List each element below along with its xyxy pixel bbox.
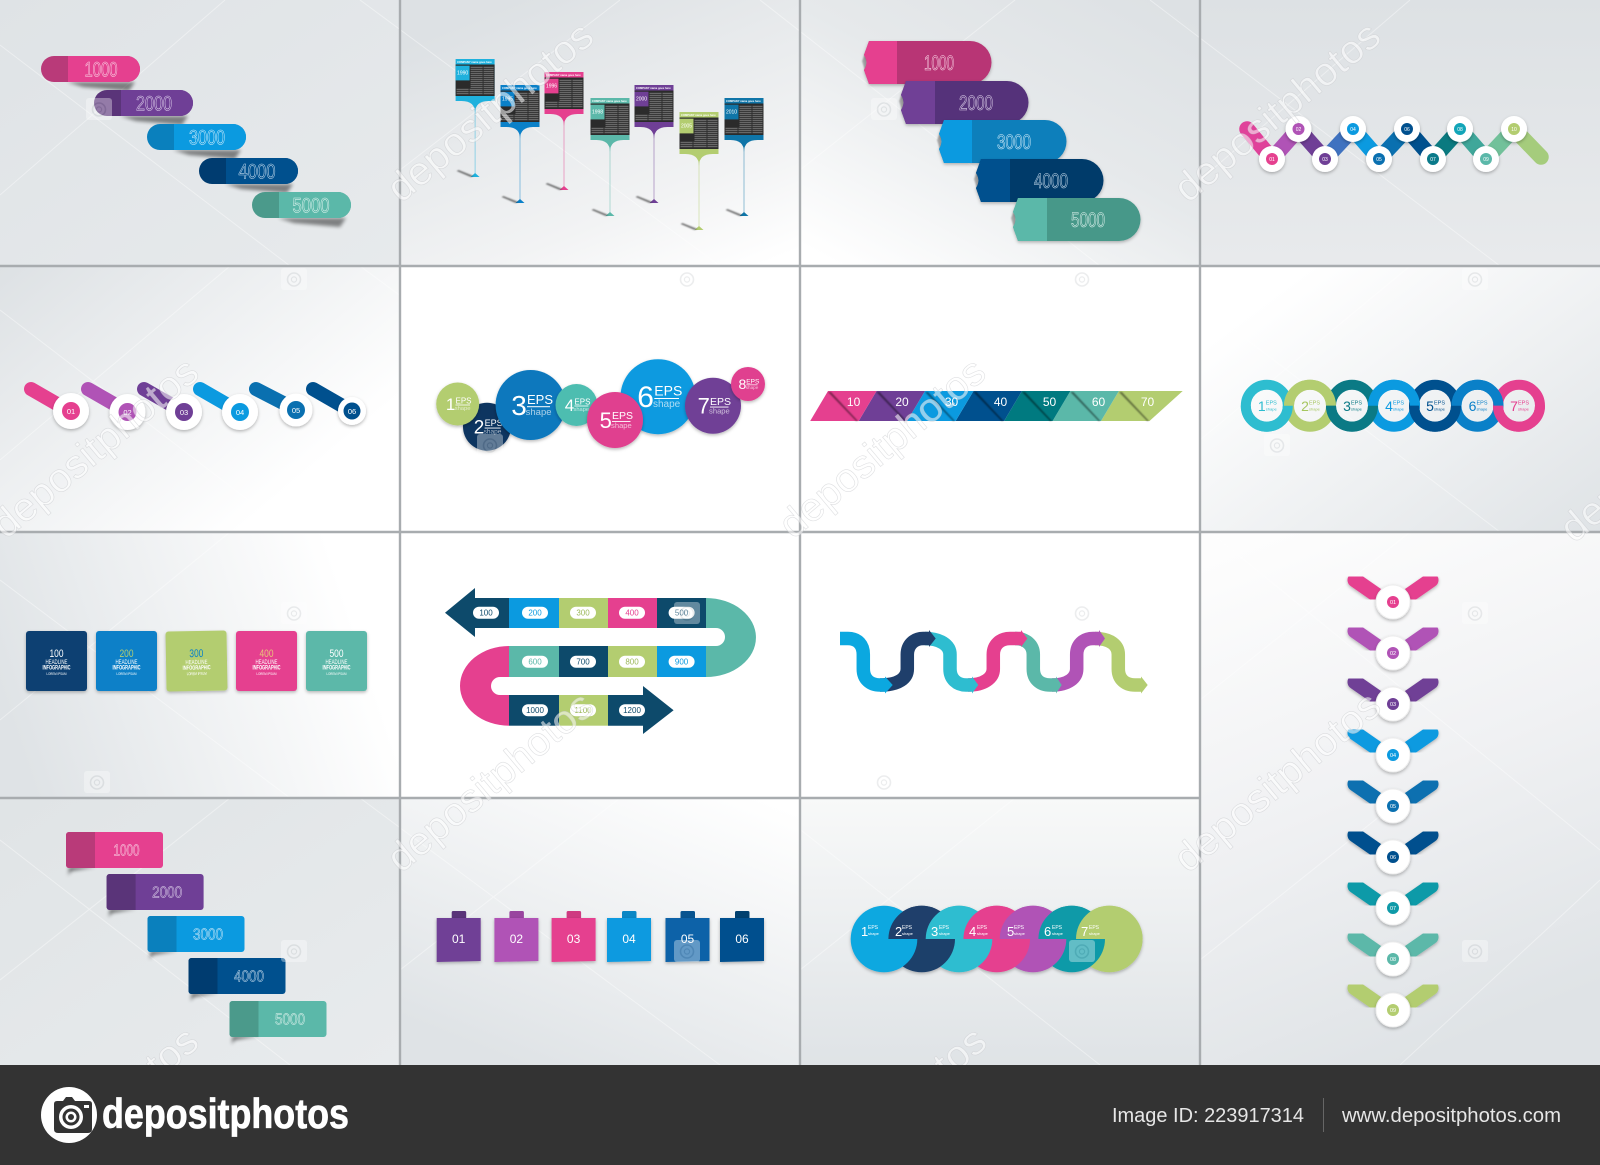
tab 4000: 4000 xyxy=(1034,170,1068,193)
circle upper halves xyxy=(888,906,1143,939)
pill 2000: 2000 xyxy=(136,92,172,116)
ring labels: shape xyxy=(1393,406,1405,412)
winged step 01: 01 xyxy=(1390,600,1396,606)
bubble 8: EPS xyxy=(746,378,760,386)
ribbon step 06 xyxy=(313,389,366,425)
pill 5000: 5000 xyxy=(292,194,330,218)
bubble 3: 3 xyxy=(511,390,527,421)
circle labels: EPS xyxy=(939,925,950,931)
circle labels: 2 xyxy=(895,924,902,939)
ring 7 xyxy=(1498,385,1540,427)
square 100: HEADLINE xyxy=(46,660,68,666)
panel: six flag ribbons with circles xyxy=(31,389,366,430)
wave green xyxy=(1095,638,1148,694)
circle labels: EPS xyxy=(1052,925,1063,931)
note 02: 02 xyxy=(510,932,523,946)
logo wordmark: depositphotos xyxy=(102,1090,349,1137)
winged step 08: 08 xyxy=(1390,957,1396,963)
image id: Image ID: 223917314 xyxy=(1112,1105,1304,1127)
pin card 1990 xyxy=(456,59,495,177)
pin card 2000: 2000 xyxy=(636,96,647,102)
note 03: 03 xyxy=(567,932,581,946)
circle labels: shape xyxy=(939,931,951,936)
snake middle row xyxy=(509,646,706,677)
pin card 2005: COMPANY name goes here xyxy=(681,113,716,117)
square 400 xyxy=(236,631,297,691)
bubble 1: EPS xyxy=(456,396,472,405)
circle labels: shape xyxy=(1089,931,1101,936)
circle labels: 4 xyxy=(969,924,976,939)
square 200: INFOGRAPHIC xyxy=(112,666,141,672)
ring 4 xyxy=(1373,385,1415,427)
bubble 1: 1 xyxy=(446,395,455,414)
pill 4000 xyxy=(199,158,298,193)
pin card 1996: 1996 xyxy=(546,84,557,90)
note 01 xyxy=(437,911,481,962)
ring labels: EPS xyxy=(1393,400,1404,406)
tab 5000 xyxy=(1011,198,1140,241)
bubble 7: 7 xyxy=(698,394,710,418)
band labels: 70 xyxy=(1141,395,1154,409)
winged step 08 xyxy=(1355,937,1431,976)
square 500: 500 xyxy=(330,648,344,660)
snake bottom row with right arrow xyxy=(509,686,674,734)
wave teal 1 xyxy=(925,638,978,694)
winged step 02 xyxy=(1355,631,1431,670)
bubble 2 xyxy=(463,403,511,451)
pill 3000: 3000 xyxy=(189,126,225,150)
ring interlocks xyxy=(1246,385,1540,427)
bubble 6: shape xyxy=(653,399,681,410)
bubble 8 xyxy=(731,367,765,401)
pin card 1998: COMPANY name goes here xyxy=(592,99,627,103)
snake labels: 800 xyxy=(625,658,639,666)
square 200: HEADLINE xyxy=(116,660,138,666)
pill 1000: 1000 xyxy=(84,58,118,82)
circle labels xyxy=(861,924,1101,939)
ring labels: shape xyxy=(1434,406,1446,412)
circle labels: EPS xyxy=(868,925,879,931)
panel: vertical winged steps xyxy=(1355,580,1431,1027)
pin card 1998 xyxy=(590,98,630,216)
square 100: INFOGRAPHIC xyxy=(42,666,71,672)
bubble 5: EPS xyxy=(612,410,633,422)
tab 4000 xyxy=(974,159,1104,202)
wave blue xyxy=(840,638,893,694)
note 04: 04 xyxy=(622,932,636,946)
winged step 04: 04 xyxy=(1390,753,1396,759)
watermarks: depositphotos xyxy=(379,13,602,211)
panel: notched tabs xyxy=(862,41,1140,241)
band labels: 50 xyxy=(1043,395,1056,409)
ribbon step 01: 01 xyxy=(67,407,75,416)
pin card 1995 xyxy=(500,85,540,203)
bubble 7 xyxy=(685,378,741,434)
square 400: LOREM IPSUM xyxy=(256,671,276,676)
pin card 2010: 2010 xyxy=(726,110,737,116)
square 200: 200 xyxy=(120,648,134,660)
ribbon step 05: 05 xyxy=(292,406,300,415)
panel: wave of arrows xyxy=(840,630,1148,694)
snake labels: 200 xyxy=(528,608,542,618)
square 400: HEADLINE xyxy=(256,660,278,666)
tab step 2000 xyxy=(107,874,204,918)
note 06: 06 xyxy=(735,932,749,946)
pin card 1995: COMPANY name goes here xyxy=(502,86,537,90)
ring labels: EPS xyxy=(1476,400,1488,406)
square 100: 100 xyxy=(50,648,64,660)
square 300: INFOGRAPHIC xyxy=(183,665,211,672)
circle labels: shape xyxy=(1052,931,1064,936)
winged step 01 xyxy=(1355,580,1431,619)
square 500: LOREM IPSUM xyxy=(326,671,346,676)
circle labels: EPS xyxy=(1089,925,1100,931)
square 300 xyxy=(165,630,228,692)
pin card 2000: COMPANY name goes here xyxy=(636,86,671,90)
ring labels: EPS xyxy=(1266,400,1277,406)
snake labels: 100 xyxy=(479,608,493,618)
winged step 09: 09 xyxy=(1390,1008,1396,1014)
pill 5000 xyxy=(252,192,351,227)
bubble 7: EPS xyxy=(710,396,731,408)
ring labels: EPS xyxy=(1518,400,1529,406)
snake labels: 700 xyxy=(576,658,590,666)
ring labels: shape xyxy=(1266,406,1277,412)
panel: folded triangle band xyxy=(810,391,1183,421)
zigzag nodes: 06 xyxy=(1404,127,1410,133)
zigzag nodes: 03 xyxy=(1322,157,1328,163)
snake labels: 1200 xyxy=(623,706,641,715)
winged step 07: 07 xyxy=(1390,906,1396,912)
bubble 2: 2 xyxy=(474,417,484,438)
zigzag nodes xyxy=(1259,116,1527,172)
website: www.depositphotos.com xyxy=(1341,1105,1561,1127)
winged step 02: 02 xyxy=(1390,651,1396,657)
ribbon step 03 xyxy=(144,389,202,430)
square 400: INFOGRAPHIC xyxy=(252,666,281,672)
tab step 3000: 3000 xyxy=(193,926,223,944)
bubble 3 xyxy=(496,370,566,440)
note 05: 05 xyxy=(681,932,694,946)
pill 2000 xyxy=(94,90,193,125)
square 300: HEADLINE xyxy=(185,660,208,666)
winged step 03: 03 xyxy=(1390,702,1396,708)
pin card 2005 xyxy=(680,112,718,230)
band segments xyxy=(810,391,1183,421)
ring labels: 7 xyxy=(1510,398,1518,414)
circle labels: EPS xyxy=(1014,925,1025,931)
ring 6 xyxy=(1456,385,1498,427)
wave navy xyxy=(880,630,936,685)
winged step 06 xyxy=(1355,835,1431,874)
note 02 xyxy=(494,911,538,962)
wave teal 2 xyxy=(1015,638,1062,694)
circle bases xyxy=(851,906,1143,972)
tab 2000 xyxy=(899,81,1028,124)
ring labels: EPS xyxy=(1434,400,1445,406)
ring 2 xyxy=(1289,385,1331,427)
panel: interlocking rings xyxy=(1246,385,1540,427)
ring labels: shape xyxy=(1309,406,1321,412)
tab step 3000 xyxy=(148,916,244,960)
pill 1000 xyxy=(41,56,140,91)
ring labels xyxy=(1258,398,1530,414)
watermarks: depositphotos xyxy=(379,683,602,881)
square 400: 400 xyxy=(260,648,274,660)
ribbon step 04 xyxy=(200,389,258,430)
snake labels: 500 xyxy=(675,608,689,618)
bubble 1 xyxy=(436,382,479,426)
tab step 1000: 1000 xyxy=(114,842,140,860)
snake labels xyxy=(473,607,695,716)
pin card 2010: COMPANY name goes here xyxy=(726,99,761,103)
ring labels: 3 xyxy=(1343,398,1351,414)
winged step 04 xyxy=(1355,733,1431,772)
ribbon step 02: 02 xyxy=(123,408,132,417)
tab 1000 xyxy=(862,41,992,84)
ring 1 xyxy=(1246,385,1288,427)
square 100 xyxy=(26,631,87,691)
pin card 1998: 1998 xyxy=(592,110,603,116)
tab 3000: 3000 xyxy=(997,131,1031,154)
snake labels: 300 xyxy=(576,608,590,618)
note 05 xyxy=(666,911,710,962)
bubble 8: shape xyxy=(746,385,759,390)
bubble 4: EPS xyxy=(574,397,590,406)
square 500: HEADLINE xyxy=(326,660,348,666)
panel: zigzag ribbon with 10 nodes xyxy=(1247,116,1541,172)
snake labels: 600 xyxy=(528,658,542,666)
band labels: 30 xyxy=(945,395,958,409)
panel: five headline squares xyxy=(26,630,367,692)
ring labels: EPS xyxy=(1309,400,1320,406)
bubble 7: shape xyxy=(709,406,730,416)
tab step 5000 xyxy=(230,1001,326,1045)
square 500: INFOGRAPHIC xyxy=(322,666,351,672)
note 01: 01 xyxy=(452,932,466,946)
pin card 2005: 2005 xyxy=(681,124,692,130)
bubble 5: shape xyxy=(611,421,632,430)
note 03 xyxy=(552,911,596,962)
band labels xyxy=(847,395,1154,409)
ring labels: 2 xyxy=(1301,398,1309,414)
panel: overlapping circles xyxy=(851,906,1143,972)
pin card 1996 xyxy=(544,72,584,190)
bubble 6: 6 xyxy=(637,381,654,414)
band labels: 60 xyxy=(1092,395,1105,409)
wave purple xyxy=(1052,630,1105,685)
snake labels: 900 xyxy=(675,658,689,666)
ring labels: shape xyxy=(1518,406,1530,412)
bubble 1: shape xyxy=(455,406,470,412)
snake top row with left arrow xyxy=(445,588,706,637)
square 500 xyxy=(306,631,367,691)
winged step 06: 06 xyxy=(1390,855,1396,861)
ring 3 xyxy=(1331,385,1373,427)
snake right curve xyxy=(706,598,756,677)
circle labels: 6 xyxy=(1044,924,1051,939)
ring labels: 1 xyxy=(1258,398,1266,414)
pill 3000 xyxy=(147,124,246,159)
square 100: LOREM IPSUM xyxy=(46,671,66,676)
snake labels: 1100 xyxy=(574,706,592,715)
zigzag nodes: 10 xyxy=(1511,127,1517,133)
tab step 1000 xyxy=(66,832,163,876)
tab step 4000 xyxy=(188,958,286,1002)
bubble 4: 4 xyxy=(565,396,574,415)
pin card 1990: COMPANY name goes here xyxy=(457,60,492,64)
ribbon step 03: 03 xyxy=(180,408,188,417)
ring labels: shape xyxy=(1476,406,1488,412)
circle labels: 5 xyxy=(1007,924,1014,939)
wave pink xyxy=(968,630,1027,685)
band labels: 20 xyxy=(895,395,909,409)
ribbon step 02 xyxy=(88,389,146,430)
band labels: 40 xyxy=(994,395,1007,409)
bubble 3: EPS xyxy=(527,392,553,407)
pin card 2000 xyxy=(634,85,674,203)
snake labels: 400 xyxy=(625,608,639,618)
band folds xyxy=(828,392,1149,421)
ring labels: EPS xyxy=(1351,400,1362,406)
square 200: LOREM IPSUM xyxy=(116,671,136,676)
bubble 6: EPS xyxy=(654,383,682,399)
bubble 2: EPS xyxy=(485,418,503,428)
winged step 07 xyxy=(1355,886,1431,925)
bubble 5 xyxy=(587,392,643,448)
panel: pin timeline cards xyxy=(456,59,764,230)
bubble 6 xyxy=(620,359,696,434)
bubble 2: shape xyxy=(484,428,502,435)
ring labels: 6 xyxy=(1469,398,1477,414)
zigzag nodes: 08 xyxy=(1457,127,1463,133)
circle labels: EPS xyxy=(977,925,988,931)
panel: note cards xyxy=(437,911,764,962)
panel: snake arrow timeline xyxy=(445,588,756,734)
zigzag nodes: 07 xyxy=(1430,157,1436,163)
tab step 5000: 5000 xyxy=(275,1012,305,1028)
icon: camera logo xyxy=(41,1087,97,1143)
watermarks: depositphotos xyxy=(1166,13,1389,211)
footer bar xyxy=(0,1065,1600,1165)
bubble 3: shape xyxy=(526,407,552,418)
ribbon step 06: 06 xyxy=(348,407,356,416)
pin card 1996: COMPANY name goes here xyxy=(546,73,581,77)
panel: rectangular step tabs xyxy=(66,832,326,1045)
tab 2000: 2000 xyxy=(959,92,993,115)
winged step 03 xyxy=(1355,682,1431,721)
zigzag nodes: 02 xyxy=(1296,127,1301,133)
circle labels: EPS xyxy=(902,925,913,931)
panel: eight bubbles xyxy=(436,359,765,451)
panel: rounded step pills xyxy=(41,56,351,227)
tab 3000 xyxy=(937,120,1066,163)
ribbon step 05 xyxy=(256,389,312,426)
square 300: 300 xyxy=(189,648,203,660)
ribbon step 04: 04 xyxy=(236,408,244,417)
watermarks: depositphotos xyxy=(771,349,994,547)
square 200 xyxy=(96,631,157,691)
winged step 05: 05 xyxy=(1390,804,1396,810)
circle labels: 3 xyxy=(931,924,938,939)
tab 5000: 5000 xyxy=(1071,209,1105,232)
pin card 2010 xyxy=(724,98,764,216)
bubble 4 xyxy=(556,384,598,426)
winged step 09 xyxy=(1355,988,1431,1027)
note 04 xyxy=(607,911,651,962)
circle labels: shape xyxy=(868,931,880,936)
tab step 4000: 4000 xyxy=(234,968,264,986)
circle labels: shape xyxy=(902,931,914,936)
zigzag nodes: 01 xyxy=(1269,157,1275,163)
ring labels: 5 xyxy=(1426,398,1434,414)
tab 1000: 1000 xyxy=(924,52,954,75)
band labels: 10 xyxy=(847,395,861,409)
watermarks: depositphotos xyxy=(1166,683,1389,881)
pill 4000: 4000 xyxy=(238,160,276,184)
ribbon step 01 xyxy=(31,389,89,429)
note 06 xyxy=(720,911,764,962)
bubble 5: 5 xyxy=(600,408,612,433)
ring 5 xyxy=(1414,385,1456,427)
snake left curve xyxy=(460,646,509,726)
zigzag ribbon xyxy=(1247,129,1541,159)
pin card 1990: 1990 xyxy=(457,70,468,76)
tab step 2000: 2000 xyxy=(152,884,182,902)
ring labels: shape xyxy=(1351,406,1363,412)
circle labels: 7 xyxy=(1081,924,1088,939)
ring labels: 4 xyxy=(1385,398,1393,414)
square 300: LOREM IPSUM xyxy=(187,671,207,676)
pin card 1995: 1995 xyxy=(502,96,513,102)
circle labels: 1 xyxy=(861,924,868,939)
bubble 4: shape xyxy=(574,407,589,413)
circle labels: shape xyxy=(977,931,989,936)
snake labels: 1000 xyxy=(526,706,544,715)
zigzag nodes: 09 xyxy=(1483,157,1489,163)
circle labels: shape xyxy=(1014,931,1026,936)
zigzag nodes: 04 xyxy=(1350,127,1356,133)
winged step 05 xyxy=(1355,784,1431,823)
zigzag nodes: 05 xyxy=(1376,157,1382,163)
bubble 8: 8 xyxy=(739,376,747,392)
